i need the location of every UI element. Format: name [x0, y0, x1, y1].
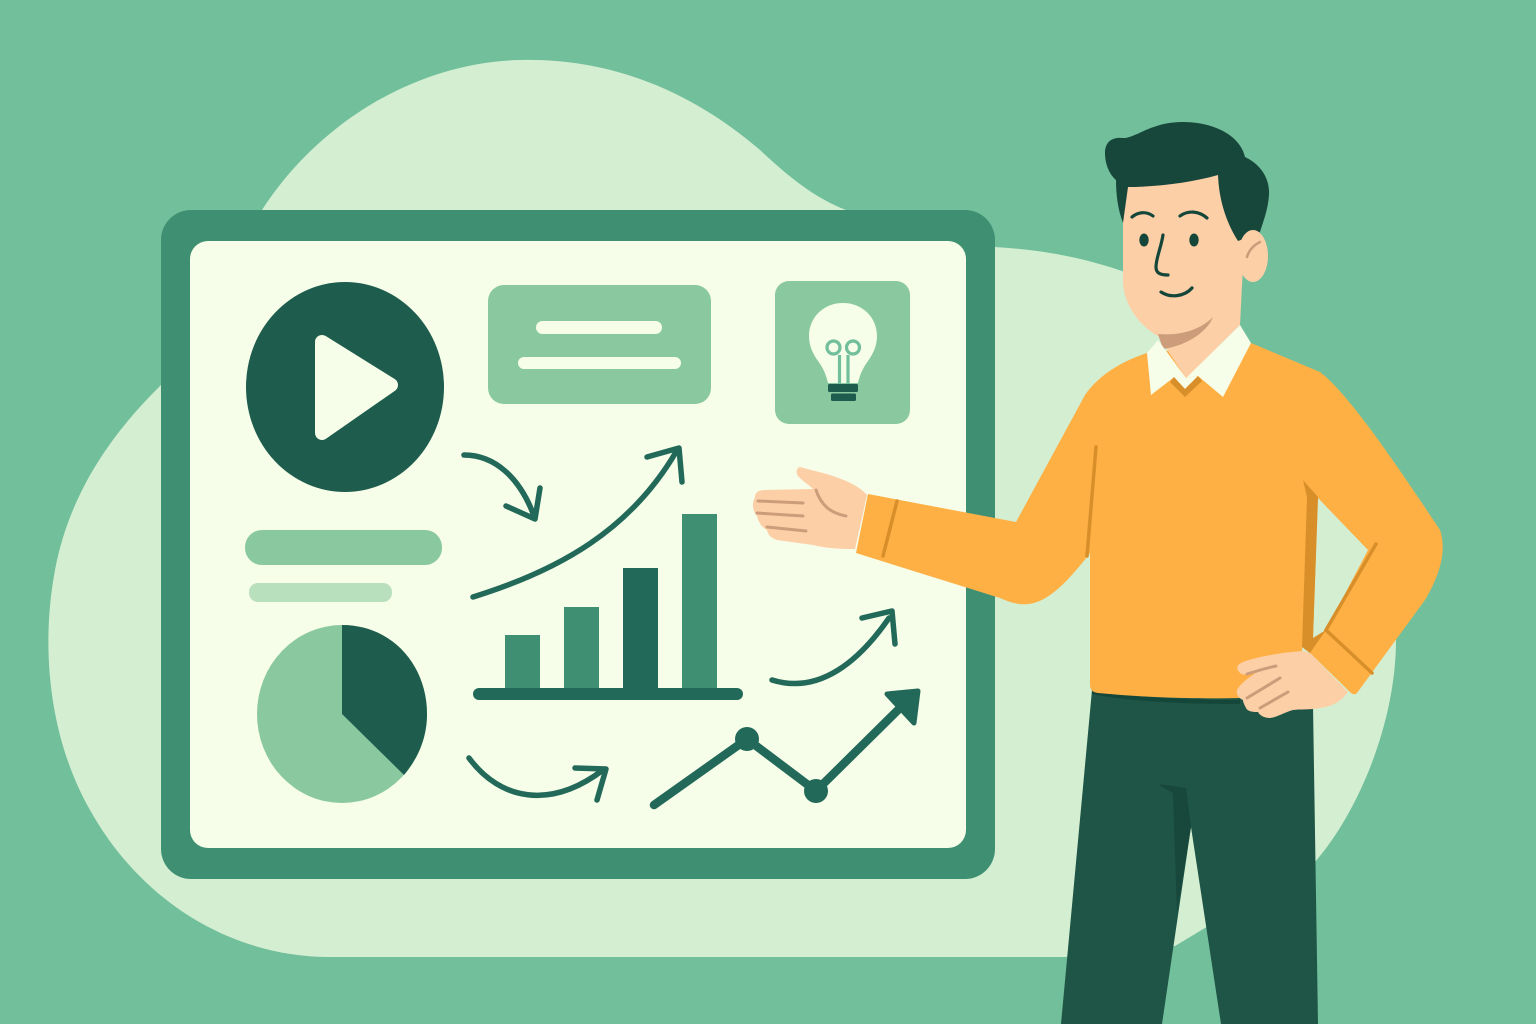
arrow: large growth curve: [473, 448, 682, 597]
hair: [1105, 122, 1269, 241]
background blob: [48, 60, 1396, 957]
pie chart: [257, 625, 427, 803]
arrow: right curved up: [772, 611, 895, 684]
shirt collar: [1147, 325, 1251, 397]
face details: [1132, 212, 1207, 296]
head and neck: [1123, 170, 1245, 378]
presenter: [753, 122, 1443, 1024]
line chart arrow: [654, 691, 918, 805]
ear: [1238, 230, 1268, 282]
neck shadow: [1158, 317, 1213, 349]
board frame: [161, 210, 995, 879]
arrow: small curved down: [464, 455, 540, 519]
arrow: bottom curved: [469, 758, 606, 800]
label bars: [245, 530, 442, 602]
hip hand: [1237, 651, 1348, 718]
text card placeholder: [488, 285, 711, 404]
pointing hand: [753, 467, 867, 549]
hand lines: [757, 490, 846, 531]
trousers: [1061, 690, 1318, 1024]
hip hand lines: [1247, 666, 1288, 708]
eyes: [1139, 234, 1199, 246]
icon: light bulb card: [775, 281, 910, 424]
waist shadow: [1092, 692, 1240, 704]
ear detail: [1247, 242, 1260, 257]
board screen: [190, 241, 966, 848]
bar chart: [473, 514, 743, 700]
sweater: [856, 343, 1443, 698]
sweater neck v: [1170, 376, 1202, 397]
trouser fold: [1159, 784, 1191, 913]
icon: play button: [246, 282, 444, 492]
gap between arm and torso: [1313, 498, 1368, 638]
sweater fold lines: [883, 447, 1376, 673]
